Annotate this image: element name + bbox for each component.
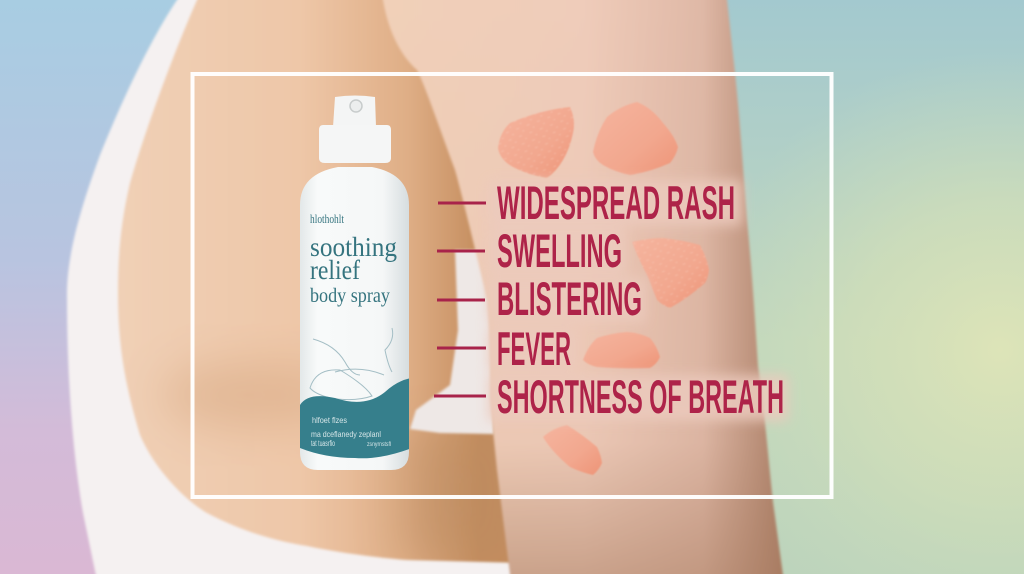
bottle collar [319, 125, 391, 163]
rash patch 5 [543, 425, 602, 475]
spray bottle [300, 96, 412, 470]
product name: soothing [310, 232, 397, 262]
rash patch 2 [593, 102, 678, 175]
arm [380, 0, 790, 574]
teal label wave [300, 378, 412, 458]
small print on wave: tat tuasrfio [311, 439, 335, 448]
spray nozzle [333, 96, 376, 127]
rash patch 3 [632, 238, 709, 308]
rash patches [498, 102, 709, 475]
rash patch 1 [498, 107, 574, 178]
lower torso shade [393, 434, 462, 558]
soft glow behind labels [488, 180, 788, 421]
label: widespread rash: WIDESPREAD RASH [497, 176, 735, 229]
underside shadow [160, 363, 340, 427]
product name: relief [310, 255, 360, 285]
label leader lines [434, 203, 486, 396]
symptom labels: FEVER [497, 322, 571, 375]
line art on label [310, 328, 393, 400]
rash patch 4 [583, 332, 660, 368]
white garment beside the arm [410, 250, 494, 434]
bottle brand: hlothohlt [310, 212, 344, 226]
small print on wave: zsnyrnstsfl [367, 442, 391, 448]
small print on wave: hlfoet flzes [312, 415, 347, 425]
product name [310, 232, 397, 307]
white frame [192, 74, 832, 497]
symptom labels [497, 176, 784, 423]
label: swelling: SWELLING [497, 224, 622, 277]
small print on wave: ma dceflanedy zeplanl [311, 429, 381, 439]
label: blistering: BLISTERING [497, 272, 642, 325]
bottle body [300, 167, 409, 470]
product name: body spray [310, 285, 390, 307]
white tank top [67, 0, 560, 574]
small print on wave [311, 415, 391, 448]
torso skin [116, 0, 510, 564]
